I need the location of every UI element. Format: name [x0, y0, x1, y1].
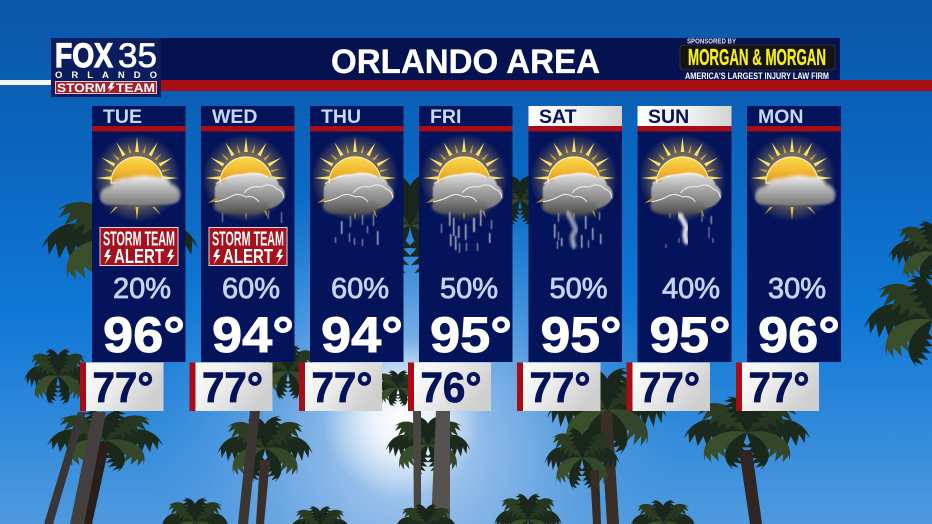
rain chance: 50%: [549, 273, 608, 305]
logo: FOX 35 Orlando Storm Team: TEAM: [116, 81, 155, 95]
icon: sun, storm cloud, lightning and rain: [530, 134, 618, 249]
background: palm trees: [24, 165, 932, 524]
column: Wednesday: [201, 106, 294, 363]
sponsor: Morgan &amp; Morgan: SPONSORED BY: [687, 38, 736, 46]
sponsor: Morgan &amp; Morgan: [680, 38, 835, 82]
logo: FOX 35 Orlando Storm Team: 35: [118, 37, 157, 75]
rain chance: 50%: [440, 273, 498, 305]
title: ORLANDO AREA: [331, 43, 600, 81]
low: Thursday: 77°: [312, 364, 372, 412]
badge: Storm Team Alert: [100, 228, 178, 268]
icon: sun, storm cloud and lightning: [638, 134, 726, 248]
rain chance: 40%: [662, 273, 720, 305]
column: Monday: [747, 106, 841, 363]
low: Sunday: 77°: [639, 364, 700, 412]
low: Friday: 76°: [420, 364, 482, 412]
day label: MON: [758, 106, 804, 128]
high temperature: 95°: [430, 307, 512, 363]
day label: SAT: [539, 106, 577, 128]
icon: sun, storm cloud and heavier rain: [420, 134, 508, 253]
icon: sun behind cloud: [748, 134, 836, 222]
logo: FOX 35 Orlando Storm Team: STORM: [57, 81, 106, 95]
high temperature: 94°: [321, 307, 403, 363]
high temperature: 94°: [212, 307, 294, 363]
high temperature: 95°: [650, 307, 730, 363]
header bar: [0, 38, 932, 91]
rain chance: 30%: [768, 273, 826, 305]
sponsor: Morgan &amp; Morgan: MORGAN & MORGAN: [688, 44, 826, 70]
logo: FOX 35 Orlando Storm Team: FOX: [55, 37, 113, 75]
rain chance: 60%: [331, 273, 389, 305]
rain chance: 20%: [113, 273, 171, 305]
column: Friday: [419, 106, 512, 363]
icon: sun, storm cloud and rain: [311, 134, 399, 246]
high temperature: 96°: [103, 307, 185, 363]
high temperature: 96°: [758, 307, 840, 363]
column: Sunday: [638, 106, 732, 363]
rain chance: 60%: [222, 273, 280, 305]
column: Tuesday: [92, 106, 186, 363]
day label: THU: [321, 106, 361, 128]
low: Wednesday: 77°: [202, 364, 263, 412]
sponsor: Morgan &amp; Morgan: AMERICA'S LARGEST INJURY LAW FIRM: [685, 71, 829, 82]
logo: FOX 35 Orlando Storm Team: [51, 37, 161, 97]
badge: Storm Team Alert: [209, 228, 287, 268]
day label: TUE: [103, 106, 142, 128]
day label: WED: [212, 106, 258, 128]
icon: sun behind cloud: [93, 134, 181, 222]
high temperature: 95°: [540, 307, 622, 363]
icon: sun, storm cloud and light rain: [202, 134, 290, 223]
column: Saturday: [528, 106, 622, 363]
low: Tuesday: 77°: [92, 364, 154, 412]
low: Saturday: 77°: [530, 364, 590, 412]
logo: FOX 35 Orlando Storm Team: ORLANDO: [55, 70, 157, 81]
day label: SUN: [648, 106, 689, 128]
day label: FRI: [430, 106, 461, 128]
column: Thursday: [310, 106, 404, 363]
low: Monday: 77°: [748, 364, 810, 412]
